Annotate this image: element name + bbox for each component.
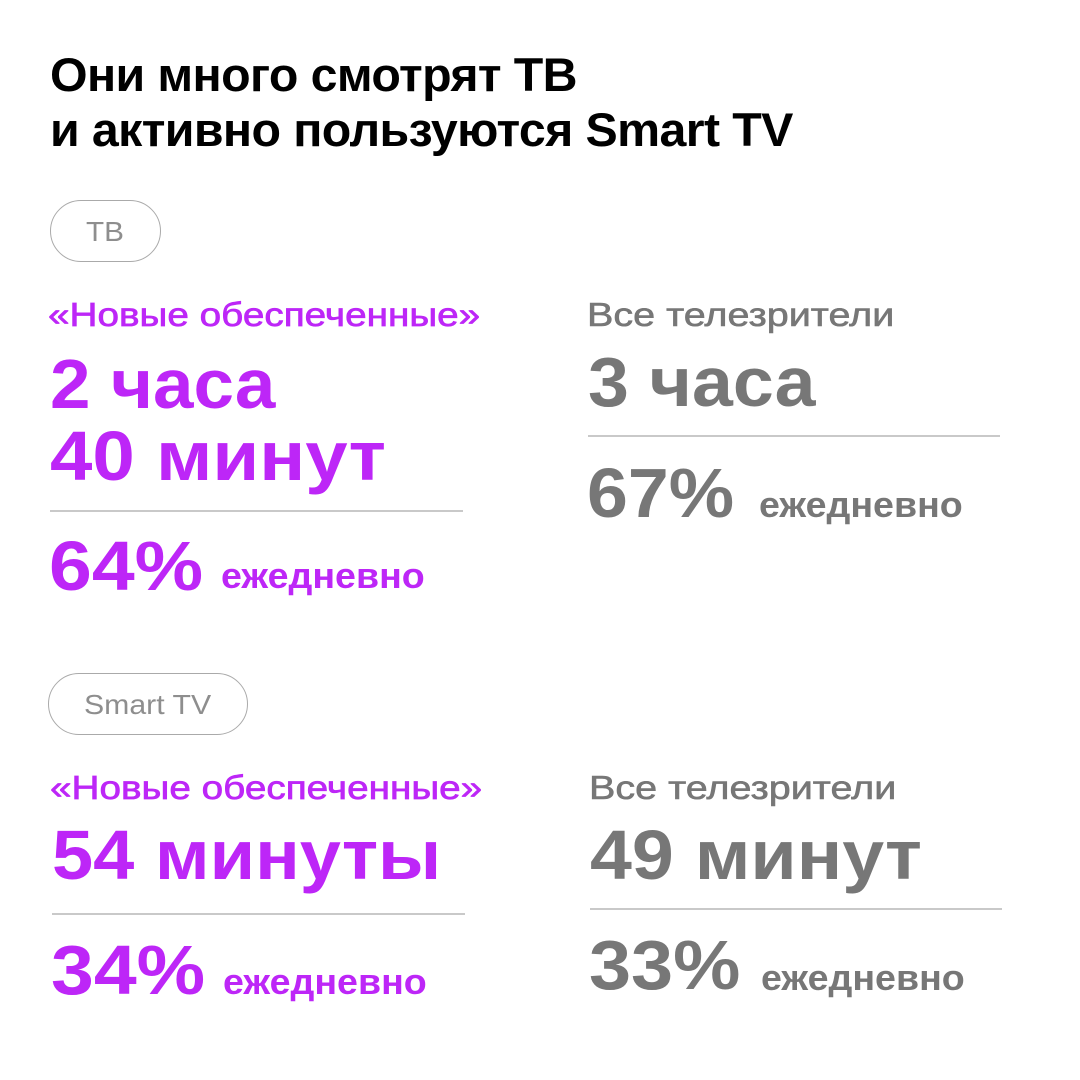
- title: и активно пользуются Smart TV: [50, 103, 793, 156]
- value: new affluent TV time: 40 минут: [50, 417, 386, 495]
- percent: new affluent Smart TV: 34%: [51, 931, 205, 1009]
- percent: all viewers TV: ежедневно: [759, 484, 963, 525]
- percent: all viewers Smart TV: ежедневно: [761, 957, 965, 998]
- tag: Smart TV: [48, 673, 248, 735]
- title: [50, 48, 793, 156]
- label: new affluent TV: «Новые обеспеченные»: [48, 297, 480, 334]
- percent: all viewers TV: [587, 454, 963, 532]
- tag: TV: [50, 200, 161, 262]
- value: new affluent TV time: [50, 345, 386, 495]
- value: new affluent Smart TV time: 54 минуты: [52, 816, 441, 894]
- percent: new affluent TV: [49, 527, 425, 605]
- value: all viewers Smart TV time: 49 минут: [590, 816, 922, 894]
- title: Они много смотрят ТВ: [50, 48, 577, 101]
- label: all viewers Smart TV: Все телезрители: [589, 770, 896, 807]
- percent: all viewers TV: 67%: [587, 454, 734, 532]
- tag: Smart TV: Smart TV: [84, 689, 211, 720]
- label: new affluent Smart TV: «Новые обеспеченные»: [50, 770, 482, 807]
- percent: new affluent Smart TV: [51, 931, 427, 1009]
- percent: all viewers Smart TV: 33%: [589, 926, 740, 1004]
- value: all viewers TV time: 3 часа: [588, 343, 816, 421]
- percent: new affluent TV: 64%: [49, 527, 203, 605]
- percent: all viewers Smart TV: [589, 926, 965, 1004]
- percent: new affluent Smart TV: ежедневно: [223, 961, 427, 1002]
- tag: TV: ТВ: [86, 216, 124, 247]
- percent: new affluent TV: ежедневно: [221, 555, 425, 596]
- value: new affluent TV time: 2 часа: [50, 345, 275, 423]
- label: all viewers TV: Все телезрители: [587, 297, 894, 334]
